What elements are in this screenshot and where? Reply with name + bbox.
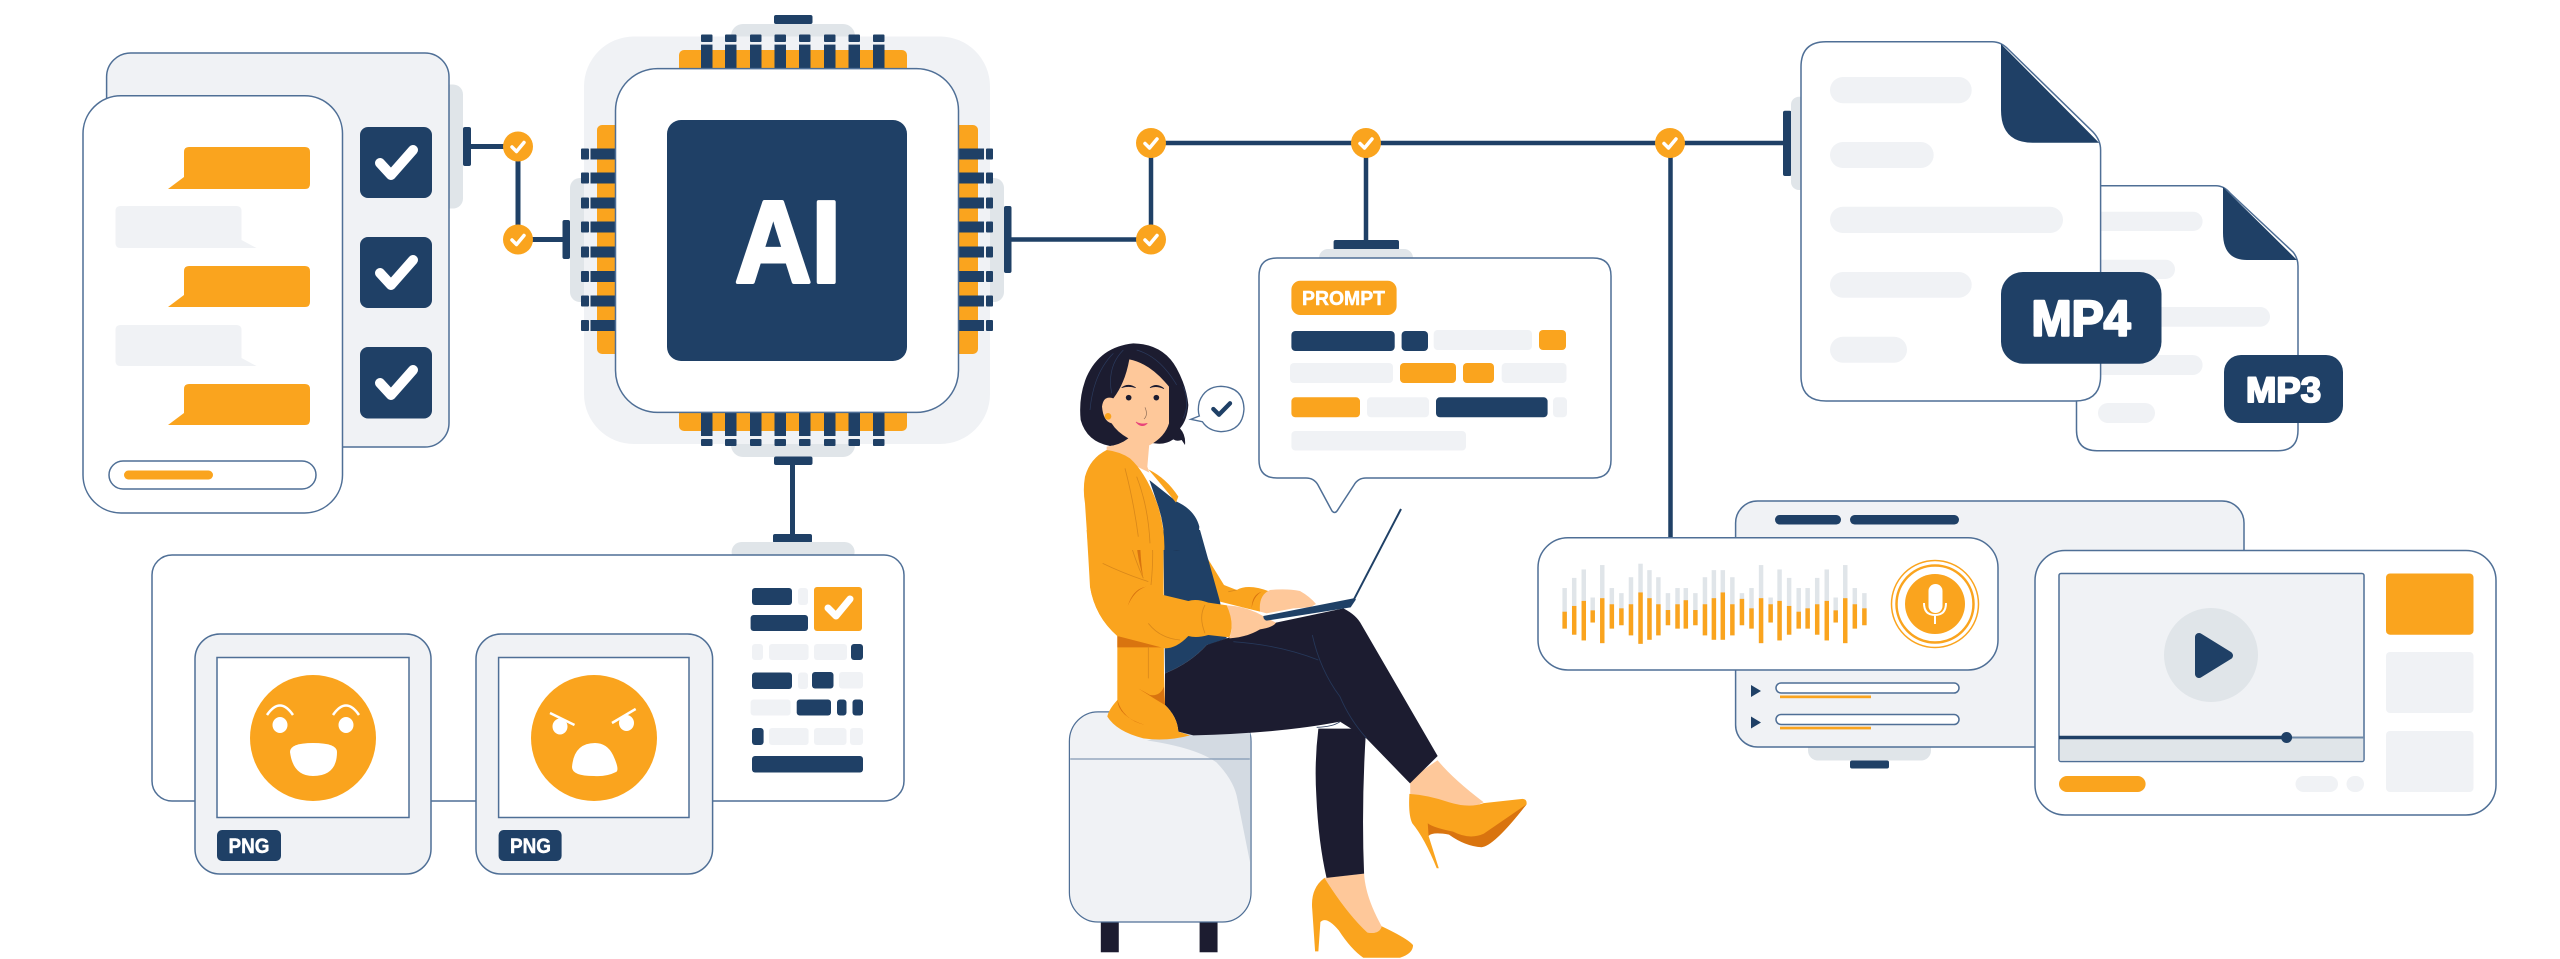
prompt text rows [1290, 330, 1567, 450]
file: MP4 document [1783, 42, 2162, 401]
chat bubble: orange 2 [168, 266, 310, 307]
navy top lower [1163, 530, 1227, 673]
connector: chat tab [440, 84, 471, 208]
icon: check node upper [503, 132, 533, 162]
hands [1227, 589, 1316, 638]
video controls [2059, 776, 2364, 792]
card background [2035, 550, 2496, 815]
badge: MP3 [2224, 355, 2343, 423]
icon: orange check [814, 587, 862, 631]
icon: check node lower left [1136, 224, 1166, 254]
icon: microphone [1892, 560, 1978, 648]
connector: chat to chip [471, 132, 563, 254]
badge: MP3: MP3 [2246, 370, 2321, 410]
near sleeve [1090, 587, 1262, 648]
chip side connectors [562, 15, 1012, 465]
settings column [751, 587, 863, 772]
document body [1801, 42, 2101, 401]
face [1102, 359, 1169, 446]
image card: happy [195, 634, 431, 874]
panel: chat window [83, 53, 471, 513]
icon: check tile 1 [360, 127, 432, 198]
panel: video player card [2035, 550, 2496, 815]
AI label: AI [735, 177, 841, 307]
cardigan body [1087, 530, 1190, 739]
cardigan shoulders [1084, 450, 1178, 550]
panel: back chat card [107, 53, 449, 447]
upper foot and shoe [1409, 760, 1527, 868]
badge: PNG: PNG [228, 835, 270, 858]
navy top upper [1149, 480, 1199, 550]
progress bar [2059, 732, 2292, 743]
badge: PNG [217, 830, 281, 861]
chip pins [581, 34, 993, 446]
thumbnail tiles [2386, 574, 2474, 792]
chip: AI processor [562, 15, 1012, 465]
panel: front chat card [83, 96, 342, 513]
document rows [2090, 212, 2270, 423]
window tab [1808, 735, 1931, 768]
neck [1107, 438, 1149, 473]
lower foot and shoe [1312, 874, 1413, 958]
figure: woman on stool with laptop [1069, 343, 1527, 958]
laptop [1263, 509, 1401, 621]
badge: MP4: MP4 [2032, 290, 2131, 346]
chat bubble: orange 3 [168, 384, 310, 425]
icon: play button [2164, 608, 2258, 702]
icon: happy face [250, 675, 376, 801]
chat bubble: gray 2 [116, 325, 256, 366]
panel: prompt speech box [1259, 240, 1611, 512]
thought bubble with check [1191, 386, 1244, 432]
image card: angry [476, 634, 713, 874]
document rows [1830, 77, 2063, 363]
far sleeve [1199, 545, 1270, 612]
video screen [2059, 574, 2364, 762]
icon: check node upper left [1136, 128, 1166, 158]
icon: check node audio [1655, 128, 1685, 158]
icon: check node lower [503, 224, 533, 254]
chip white body [616, 69, 958, 412]
icon: check tile 2 [360, 237, 432, 308]
chat input bar [109, 461, 316, 489]
badge: PNG [499, 830, 562, 861]
legs and shoes [1312, 729, 1527, 958]
document fold [2223, 187, 2297, 260]
waveform gray bars [1562, 564, 1867, 644]
audio track 1 [1751, 683, 1959, 698]
badge: PNG: PNG [510, 835, 551, 858]
document fold [2001, 44, 2099, 143]
window header pills [1775, 515, 1959, 524]
icon: check node prompt [1351, 128, 1381, 158]
window background [1736, 501, 2244, 747]
connector: chip to image panel [732, 465, 855, 562]
document tab [1783, 97, 1811, 190]
badge: PROMPT [1291, 281, 1397, 315]
lower trouser leg [1316, 729, 1366, 878]
badge: PROMPT: PROMPT [1302, 288, 1385, 310]
chat bubble: gray 1 [116, 206, 256, 248]
file: MP3 document [2076, 186, 2343, 451]
torso and lap [1087, 509, 1438, 783]
chat bubble: orange 1 [168, 147, 310, 189]
panel: audio library window [1736, 501, 2244, 768]
prompt tab [1319, 240, 1413, 269]
panel background [152, 555, 904, 801]
connector: main output bus [1011, 128, 1784, 538]
hair [1080, 343, 1188, 446]
stool [1069, 712, 1251, 952]
panel: audio waveform card [1538, 538, 1998, 670]
waveform orange bars [1562, 592, 1867, 644]
trousers [1165, 608, 1438, 783]
card background [1538, 538, 1998, 670]
icon: angry face [531, 675, 657, 801]
upper body and head [1080, 343, 1244, 550]
chip backing [584, 36, 990, 444]
panel: image generation [152, 555, 904, 874]
prompt box outline [1259, 258, 1611, 512]
chip AI square [667, 120, 907, 361]
audio track 2 [1751, 714, 1959, 729]
chip orange strips [597, 50, 978, 431]
badge: MP4 [2001, 272, 2162, 364]
icon: check tile 3 [360, 347, 432, 418]
